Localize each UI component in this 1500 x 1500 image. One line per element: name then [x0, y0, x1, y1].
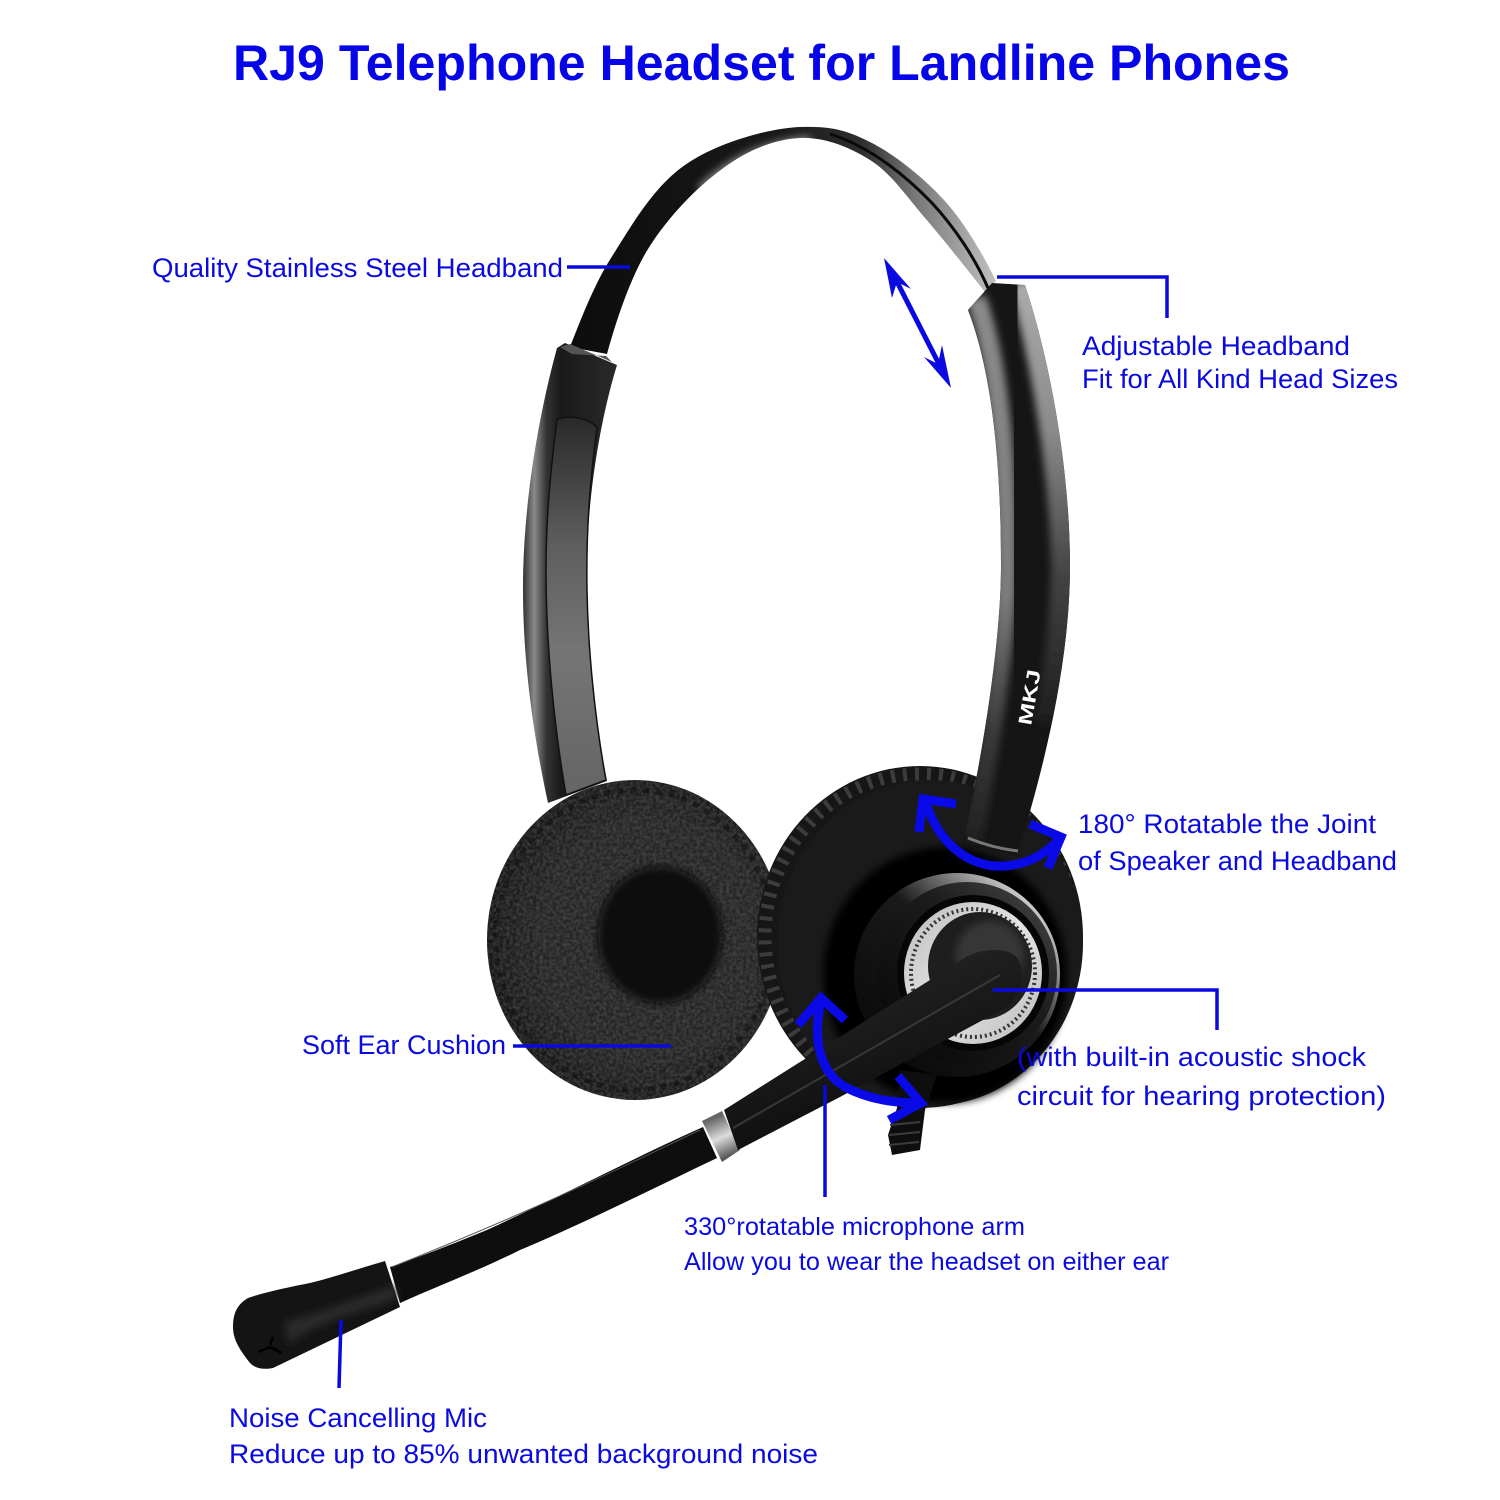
speaker hub [928, 912, 1032, 1020]
boom pivot arm [724, 950, 1022, 1150]
callout: 180 degree joint: of Speaker and Headband [1078, 846, 1397, 876]
speaker shell [854, 873, 1060, 1077]
stainless steel headband [570, 127, 996, 354]
ridged cushion edge [765, 774, 1075, 1100]
headset photo [233, 127, 1083, 1369]
microphone capsule [233, 1261, 400, 1369]
callout: adjustable headband [997, 277, 1398, 394]
infographic canvas [153, 44, 1398, 1468]
callout: noise cancelling mic [229, 1320, 818, 1469]
callout: 330 degree microphone arm [684, 1085, 1169, 1276]
callout: 180 degree joint [1078, 809, 1397, 876]
callout: adjustable headband: Adjustable Headband [1082, 331, 1350, 361]
callout: acoustic shock protection: circuit for hearing protection) [1017, 1081, 1386, 1111]
callout: 180 degree joint: 180° Rotatable the Joint [1078, 809, 1377, 839]
title: RJ9 Telephone Headset for Landline Phones [233, 35, 1290, 91]
MKJ logo: MKJ [1015, 668, 1046, 727]
speaker shadow [823, 847, 1067, 1103]
right ear cushion and speaker [757, 766, 1083, 1108]
icon: 180 degree rotation arrow [919, 799, 1061, 868]
callout: quality stainless steel headband: Quality Stainless Steel Headband [152, 253, 563, 283]
callout: soft ear cushion: Soft Ear Cushion [302, 1030, 506, 1060]
silver boom ring [702, 1111, 740, 1162]
callout: 330 degree microphone arm: Allow you to wear the headset on either ear [684, 1248, 1169, 1276]
callout: 330 degree microphone arm: 330°rotatable microphone arm [684, 1213, 1025, 1241]
callout: noise cancelling mic: Reduce up to 85% unwanted background noise [229, 1439, 818, 1469]
cushion back [757, 766, 1083, 1108]
callout: adjustable headband: Fit for All Kind Head Sizes [1082, 364, 1398, 394]
right headband slider [962, 280, 1070, 855]
microphone boom arm [390, 950, 1022, 1303]
coiled cable strain relief [888, 1070, 937, 1155]
callout: noise cancelling mic: Noise Cancelling Mic [229, 1403, 487, 1433]
callout: acoustic shock protection [993, 990, 1386, 1111]
left ear cushion [487, 780, 783, 1100]
speaker inner shell [877, 882, 1057, 1064]
icon: 330 degree rotation arrow [798, 998, 921, 1120]
callout: acoustic shock protection: (with built-in acoustic shock [1017, 1042, 1367, 1072]
perforated metal ring [904, 902, 1042, 1044]
icon: adjustable double arrow [884, 258, 951, 388]
cushion face [777, 780, 1083, 1106]
left headband slider [523, 343, 617, 803]
